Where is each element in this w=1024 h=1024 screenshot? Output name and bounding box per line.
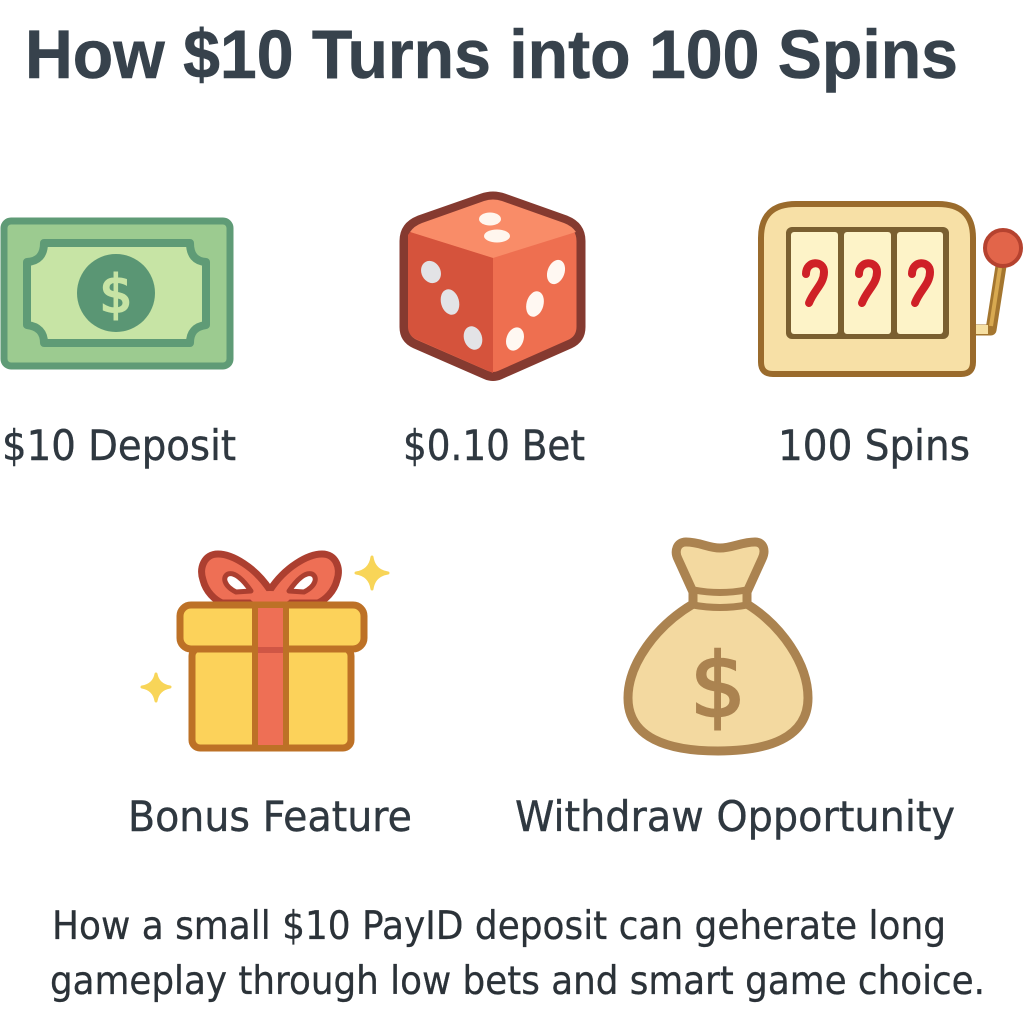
icon: red die bbox=[404, 196, 581, 376]
icon: money bag bbox=[628, 542, 808, 751]
label: $10 Deposit: $10 Deposit bbox=[2, 421, 236, 470]
title: How $10 Turns into 100 Spins bbox=[25, 16, 958, 93]
label: Bonus Feature: Bonus Feature bbox=[128, 792, 412, 841]
icon: banknote: $ bbox=[99, 265, 133, 325]
caption bbox=[50, 904, 985, 1004]
label: 100 Spins: 100 Spins bbox=[778, 421, 970, 470]
label: Withdraw Opportunity: Withdraw Opportunity bbox=[515, 792, 955, 841]
icon: gift box bbox=[142, 554, 388, 748]
label: $0.10 Bet: $0.10 Bet bbox=[403, 421, 585, 470]
caption: How a small $10 PayID deposit can geherate long bbox=[52, 904, 946, 949]
icon: banknote bbox=[4, 221, 230, 366]
icon: money bag: $ bbox=[690, 634, 746, 737]
icon: slot machine bbox=[761, 204, 1021, 374]
